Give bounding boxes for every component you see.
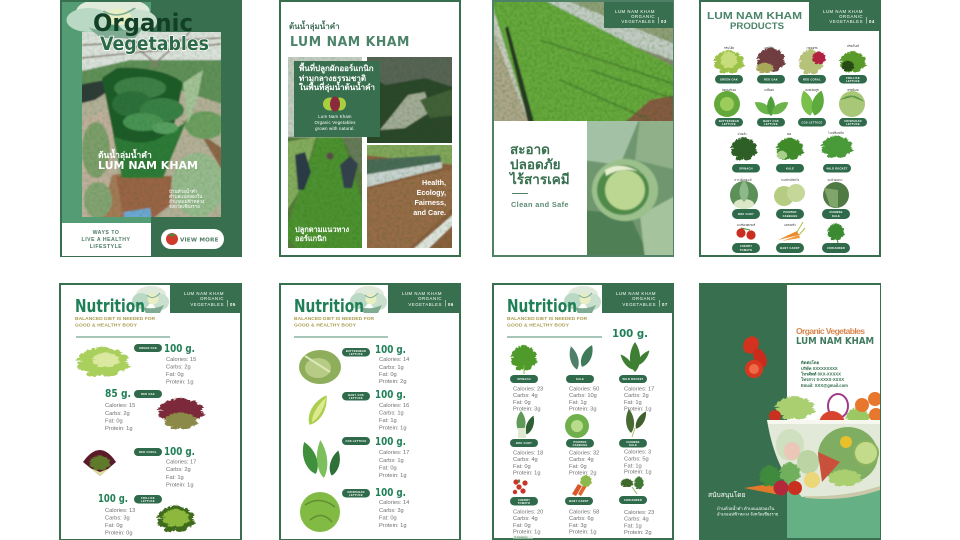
item: pointed cabbage: CABBAGE — [573, 443, 587, 447]
panel: nutrition page 07 — [493, 284, 673, 539]
cover small text: อำเภอแม่ฟ้าหลวง — [169, 199, 204, 204]
item: baby carot: Calories: 58 — [569, 510, 599, 516]
decorative cabbage — [350, 286, 387, 313]
cover small text — [169, 188, 204, 209]
item: frillice lettuce — [98, 492, 195, 536]
item: red coral: Fat: 1g — [166, 475, 184, 481]
product: pointed cabbage: POINTED — [783, 210, 797, 214]
item: wild rocket: Calories: 17 — [624, 386, 654, 392]
item: frillice lettuce: FRILLICE — [141, 496, 155, 500]
contact details: โทรศัพท์ 0XX-XXXXX — [800, 370, 841, 376]
photo: planting trays — [367, 145, 452, 248]
illustration: vegetables beside bowl — [744, 462, 802, 496]
item: cos lettuce: Protein: 1g — [379, 473, 407, 479]
product: baby cos lettuce: เบบี้คอส — [764, 88, 774, 92]
item: butterhead lettuce: Calories: 14 — [379, 357, 409, 363]
white caption box: LIVE A HEALTHY — [82, 237, 130, 243]
item: baby carot: BABY CAROT — [569, 499, 589, 503]
item: green oak: Carbs: 2g — [166, 364, 191, 370]
item: bok choy: Calories: 18 — [513, 450, 543, 456]
contact details — [800, 359, 848, 388]
product: red oak — [756, 46, 785, 84]
item: bok choy: Carbs: 4g — [513, 457, 538, 463]
product: red coral: เรดคอรัล — [806, 46, 818, 50]
item: red coral: Calories: 17 — [166, 460, 196, 466]
item: cos lettuce — [298, 435, 409, 479]
photo caption: principles: and Care. — [413, 208, 446, 217]
decorative cabbage — [564, 286, 601, 313]
heading: Nutrition — [75, 296, 145, 317]
green info box: grown with natural. — [315, 126, 355, 131]
item: cos lettuce: 100 g. — [375, 435, 406, 448]
subheading — [507, 316, 587, 328]
item: butterhead lettuce: BUTTERHEAD — [346, 349, 366, 353]
panel: back cover — [699, 283, 883, 540]
item: spinach: SPINACH — [517, 377, 531, 381]
section tag — [604, 2, 673, 28]
item: coriander — [619, 476, 654, 536]
item: crisphead lettuce: Protein: 1g — [379, 523, 407, 529]
panel: nutrition page 05 — [60, 284, 241, 540]
product: coriander: ผักชี — [834, 223, 840, 227]
heading: Nutrition — [507, 296, 577, 317]
green info box: ในพื้นที่ลุ่มน้ำต้นน้ำคำ — [299, 81, 375, 93]
item: kale: Carbs: 10g — [569, 393, 597, 399]
item: coriander: Calories: 23 — [624, 510, 654, 516]
product: frillice lettuce — [839, 44, 867, 84]
product: baby carot: BABY CAROT — [780, 246, 800, 250]
item: bok choy: Fat: 0g — [513, 464, 531, 470]
item: butterhead lettuce: 100 g. — [375, 343, 406, 356]
item: cherry tomato: TOMATO — [518, 501, 530, 505]
illustration: salad bowl — [767, 392, 883, 499]
section tag: 06 — [448, 302, 454, 307]
item: spinach: Fat: 0g — [513, 400, 531, 406]
subheading — [75, 316, 155, 328]
product: spinach: ปวยเล้ง — [737, 132, 747, 136]
icon: sliced tomatoes — [740, 333, 770, 378]
product: frillice lettuce: ฟริลล์ไอซ์ — [847, 44, 859, 48]
section tag: VEGETABLES — [190, 302, 224, 307]
product: butterhead lettuce: บัตเตอร์เฮด — [722, 88, 736, 92]
item: pointed cabbage: Fat: 0g — [569, 464, 587, 470]
contact details: ติดต่อโดย — [801, 359, 820, 365]
item: crisphead lettuce: CRISPHEAD — [347, 490, 365, 494]
product: red oak: เรดโอ๊ค — [764, 46, 774, 50]
item: crisphead lettuce: Carbs: 3g — [379, 508, 404, 514]
product: pointed cabbage: กะหล่ำปลีหัวใจ — [781, 178, 799, 182]
brand heading: LUM NAM KHAM — [290, 35, 410, 50]
item: frillice lettuce: LETTUCE — [141, 499, 155, 503]
item: red coral: Protein: 1g — [166, 482, 194, 488]
item: chinese kale: KALE — [629, 443, 637, 447]
product: kale: KALE — [786, 166, 794, 170]
heading — [707, 10, 802, 32]
section tag: 05 — [230, 302, 236, 307]
green info box: พื้นที่ปลูกผักออร์แกนิก — [299, 62, 374, 74]
item: baby carot: Fat: 3g — [569, 523, 587, 529]
product: kale: เคล — [787, 132, 792, 136]
serving size: 100 g. — [612, 327, 648, 340]
title: Organic: Organic — [93, 9, 193, 37]
item: crisphead lettuce: Fat: 0g — [379, 516, 397, 522]
subtitle: Clean and Safe — [511, 200, 569, 209]
product: spinach — [731, 132, 760, 172]
item: cherry tomato: Carbs: 4g — [513, 516, 538, 522]
product: crisphead lettuce: คริสป์เฮด — [847, 88, 859, 92]
item: green oak: Protein: 1g — [166, 380, 194, 386]
item: frillice lettuce: Fat: 0g — [105, 523, 123, 529]
item: spinach — [510, 345, 543, 412]
item: frillice lettuce: Carbs: 3g — [105, 516, 130, 522]
item: spinach: Carbs: 4g — [513, 393, 538, 399]
subheading: GOOD & HEALTHY BODY — [75, 322, 138, 328]
product: baby cos lettuce: BABY COS — [763, 119, 779, 123]
product: baby carot — [776, 222, 805, 253]
Thai slogan: ไร้สารเคมี — [508, 171, 570, 187]
green info box: Lum Nam Kham — [318, 114, 352, 119]
green info box: ท่ามกลางธรรมชาติ — [299, 74, 366, 83]
panel: page 2 about the farm — [280, 1, 460, 256]
item: cos lettuce: Carbs: 1g — [379, 458, 404, 464]
heading: organic vegetables: Organic Vegetables — [796, 326, 865, 336]
photo caption: principles: Fairness, — [414, 198, 446, 207]
contact details: โทรสาร 0-XXXX-XXXX — [800, 376, 844, 382]
section tag: ORGANIC — [418, 296, 442, 301]
item: baby cos lettuce: 100 g. — [375, 388, 406, 401]
item: pointed cabbage — [565, 414, 599, 476]
heading: LUM NAM KHAM — [707, 10, 802, 22]
product: pointed cabbage — [774, 178, 805, 219]
product: kale — [776, 132, 804, 172]
decorative cabbage — [132, 286, 169, 313]
panel: page 3 clean and safe — [490, 0, 677, 259]
product: baby cos lettuce: LETTUCE — [764, 122, 778, 126]
product: butterhead lettuce: LETTUCE — [722, 122, 736, 126]
product: wild rocket: WILD ROCKET — [826, 166, 848, 170]
section tag: VEGETABLES — [622, 302, 656, 307]
item: green oak: Fat: 0g — [166, 372, 184, 378]
item: red coral: Carbs: 2g — [166, 467, 191, 473]
item: pointed cabbage: POINTED — [573, 440, 587, 444]
cover small text: บ้านห้วยน้ำคำ — [169, 188, 198, 194]
green info box — [294, 61, 380, 137]
green info box: Organic Vegetables — [314, 120, 356, 125]
section tag: LUM NAM KHAM — [616, 291, 656, 296]
heading: brand: LUM NAM KHAM — [796, 336, 874, 347]
item: baby carot — [565, 475, 599, 536]
item: pointed cabbage: Calories: 32 — [569, 450, 599, 456]
item: wild rocket: Protein: 1g — [624, 406, 652, 412]
icon: lettuce logo — [323, 96, 346, 112]
item: baby cos lettuce: LETTUCE — [349, 396, 363, 400]
contact details: Email: XXX@gmail.com — [801, 383, 848, 388]
item: red oak: Protein: 1g — [105, 426, 133, 432]
subheading: BALANCED DIET IS NEEDED FOR — [75, 316, 155, 322]
section tag: VEGETABLES — [829, 19, 863, 24]
item: cherry tomato: CHERRY — [518, 498, 530, 502]
item: red coral — [83, 445, 196, 488]
cover small text: จังหวัดเชียงราย — [169, 203, 200, 209]
item: butterhead lettuce: Protein: 2g — [379, 379, 407, 385]
item: green oak: 100 g. — [164, 342, 195, 355]
photo caption: organic farming: ปลูกตามแนวทาง — [295, 225, 350, 235]
item: cherry tomato — [510, 479, 543, 539]
product: coriander: CORIANDER — [827, 246, 845, 250]
white caption box: LIFESTYLE — [90, 244, 122, 250]
item: kale: KALE — [576, 377, 584, 381]
item: green oak: GREEN OAK — [139, 346, 157, 350]
section tag: 07 — [662, 302, 668, 307]
sponsor heading: สนับสนุนโดย — [708, 491, 746, 499]
item: chinese kale: Protein: 1g — [624, 470, 652, 476]
item: chinese kale: Calories: 3 — [624, 450, 651, 456]
section tag: 04 — [869, 19, 875, 24]
section tag: 03 — [661, 19, 667, 24]
product: butterhead lettuce — [714, 88, 743, 126]
heading: Nutrition — [294, 296, 364, 317]
subheading — [294, 316, 374, 328]
item: wild rocket: Fat: 1g — [624, 400, 642, 406]
product: frillice lettuce: FRILLICE — [846, 76, 860, 80]
product: frillice lettuce: LETTUCE — [846, 79, 860, 83]
item: coriander: Fat: 1g — [624, 524, 642, 530]
sponsor address: บ้านห้วยน้ำคำ ตำบลแม่สลองใน — [717, 505, 774, 511]
section tag: LUM NAM KHAM — [402, 291, 442, 296]
item: crisphead lettuce: LETTUCE — [349, 493, 363, 497]
section tag — [388, 284, 460, 313]
item: bok choy: Protein: 1g — [513, 470, 541, 476]
item: baby cos lettuce: BABY COS — [348, 393, 364, 397]
item: butterhead lettuce: Carbs: 1g — [379, 365, 404, 371]
item: wild rocket — [618, 342, 654, 412]
view more button: VIEW MORE — [180, 238, 219, 244]
product: baby carot: แครอทจิ๋ว — [784, 222, 796, 227]
white caption box — [62, 223, 151, 256]
section tag: VEGETABLES — [408, 302, 442, 307]
panel: page 4 products — [700, 1, 880, 256]
cover brand name: LUM NAM KHAM — [98, 160, 198, 172]
photo: aerial view — [367, 57, 452, 143]
item: chinese kale: CHINESE — [626, 440, 640, 444]
item: cos lettuce: Calories: 17 — [379, 450, 409, 456]
product: cherry tomato: CHERRY — [740, 244, 752, 248]
item: baby cos lettuce: Fat: 1g — [379, 418, 397, 424]
product: spinach: SPINACH — [739, 166, 753, 170]
item: chinese kale: Carbs: 5g — [624, 456, 649, 462]
cover small text: ตำบลแม่สลองใน — [169, 194, 203, 199]
product: chinese kale: คะน้าฮ่องกง — [828, 178, 843, 182]
item: frillice lettuce: Calories: 13 — [105, 508, 135, 514]
photo caption: principles: Health, — [422, 178, 446, 187]
item: crisphead lettuce: Calories: 14 — [379, 500, 409, 506]
product: coriander — [822, 223, 850, 253]
item: bok choy — [510, 411, 543, 476]
item: bok choy: BOK CHOY — [516, 441, 532, 445]
item: pointed cabbage: Carbs: 4g — [569, 457, 594, 463]
photo: cabbage — [587, 121, 673, 255]
section tag: LUM NAM KHAM — [615, 9, 655, 14]
serving note: (1 tomatoes) — [514, 536, 528, 539]
section tag — [170, 284, 241, 313]
white caption box: WAYS TO — [93, 230, 119, 236]
item: frillice lettuce: 100 g. — [98, 492, 128, 505]
item: crisphead lettuce — [300, 486, 409, 532]
section tag: LUM NAM KHAM — [823, 9, 863, 14]
item: red oak: Fat: 0g — [105, 418, 123, 424]
subheading: BALANCED DIET IS NEEDED FOR — [507, 316, 587, 322]
product: cherry tomato: TOMATO — [740, 248, 752, 252]
product: cos lettuce: คอสเลตทูซ — [805, 88, 819, 92]
product: green oak — [714, 46, 744, 84]
product: bok choy: BOK CHOY — [738, 212, 754, 216]
product: chinese kale: KALE — [832, 214, 840, 218]
product: wild rocket: ไวลด์ร็อกเก็ต — [827, 130, 844, 135]
section tag — [602, 284, 673, 313]
item: coriander: Protein: 2g — [624, 530, 652, 536]
product: chinese kale — [822, 178, 850, 219]
item: kale: Calories: 50 — [569, 386, 599, 392]
product: bok choy: กวางตุ้งฮ่องเต้ — [735, 178, 752, 183]
item: spinach: Protein: 3g — [513, 406, 541, 412]
item: wild rocket: Carbs: 2g — [624, 393, 649, 399]
item: baby carot: Carbs: 6g — [569, 516, 594, 522]
item: cherry tomato: Protein: 1g — [513, 530, 541, 536]
product: pointed cabbage: CABBAGE — [783, 214, 797, 218]
sponsor address: อำเภอแม่ฟ้าหลวง จังหวัดเชียงราย — [717, 512, 779, 516]
panel: nutrition page 06 — [280, 284, 460, 540]
subheading: GOOD & HEALTHY BODY — [507, 322, 570, 328]
item: green oak: Calories: 15 — [166, 357, 196, 363]
item: butterhead lettuce: Fat: 0g — [379, 372, 397, 378]
contact details: บริษัท XXXXXXXXX — [801, 366, 838, 371]
item: kale: Fat: 1g — [569, 400, 587, 406]
item: frillice lettuce: Protein: 0g — [105, 530, 133, 536]
product: baby cos lettuce — [752, 88, 791, 126]
item: spinach: Calories: 23 — [513, 386, 543, 392]
section tag: LUM NAM KHAM — [184, 291, 224, 296]
item: crisphead lettuce: 100 g. — [375, 486, 406, 499]
item: cos lettuce: COS LETTUCE — [345, 439, 367, 443]
product: red oak: RED OAK — [764, 77, 778, 81]
item: cherry tomato: Calories: 20 — [513, 510, 543, 516]
photo caption: organic farming — [295, 225, 350, 243]
product: red coral — [798, 46, 826, 84]
item: cherry tomato: Fat: 0g — [513, 523, 531, 529]
Thai slogan: สะอาด — [510, 142, 550, 157]
item: red coral: 100 g. — [164, 445, 195, 458]
product: bok choy — [730, 178, 760, 219]
item: baby cos lettuce — [304, 388, 409, 432]
product: cherry tomato: มะเขือเทศเชอรี่ — [737, 223, 756, 227]
item: butterhead lettuce — [299, 343, 409, 385]
item: chinese kale — [619, 409, 652, 476]
cover photo: vegetables in banana leaf — [78, 28, 225, 221]
section tag: VEGETABLES — [621, 19, 655, 24]
product: crisphead lettuce: LETTUCE — [846, 122, 860, 126]
item: coriander: Carbs: 4g — [624, 516, 649, 522]
photo: seedling beds — [490, 0, 677, 125]
item: baby carot: Protein: 1g — [569, 530, 597, 536]
cover Thai heading: ต้นน้ำลุ่มน้ำคำ — [98, 148, 152, 161]
product: cos lettuce — [798, 88, 827, 126]
Thai heading: ต้นน้ำลุ่มน้ำคำ — [289, 20, 340, 32]
item: red oak: 85 g. — [105, 387, 131, 400]
section tag: ORGANIC — [839, 14, 863, 19]
product: wild rocket — [821, 130, 853, 172]
product: red coral: RED CORAL — [803, 77, 821, 81]
item: baby cos lettuce: Calories: 16 — [379, 403, 409, 409]
section tag — [809, 2, 880, 31]
photo caption: organic farming: ออร์แกนิก — [295, 234, 327, 243]
item: red oak: Calories: 15 — [105, 403, 135, 409]
item: butterhead lettuce: LETTUCE — [349, 352, 363, 356]
item: green oak — [77, 342, 196, 386]
item: kale: Protein: 3g — [569, 406, 597, 412]
sponsor address — [717, 505, 779, 516]
panel: cover page — [60, 0, 242, 257]
product: cos lettuce: COS LETTUCE — [801, 120, 823, 124]
section tag: ORGANIC — [631, 14, 655, 19]
product: green oak: กรีนโอ๊ค — [724, 46, 734, 50]
section tag: ORGANIC — [632, 296, 656, 301]
section tag: ORGANIC — [200, 296, 224, 301]
item: cos lettuce: Fat: 0g — [379, 466, 397, 472]
item: coriander: CORIANDER — [624, 498, 642, 502]
product: butterhead lettuce: BUTTERHEAD — [719, 119, 739, 123]
decorative cabbage — [66, 0, 157, 38]
product: cherry tomato — [732, 223, 760, 253]
item: baby cos lettuce: Protein: 1g — [379, 426, 407, 432]
item: kale — [566, 343, 599, 412]
product: chinese kale: CHINESE — [829, 210, 843, 214]
photo caption: principles: Ecology, — [417, 188, 446, 197]
item: chinese kale: Fat: 1g — [624, 464, 642, 470]
product: crisphead lettuce — [839, 88, 867, 126]
Thai slogan — [508, 142, 570, 187]
item: red oak: Carbs: 2g — [105, 411, 130, 417]
product: crisphead lettuce: CRISPHEAD — [844, 119, 862, 123]
heading: PRODUCTS — [730, 21, 784, 32]
product: green oak: GREEN OAK — [720, 77, 738, 81]
item: red oak: RED OAK — [141, 392, 155, 396]
item: pointed cabbage: Protein: 2g — [569, 470, 597, 476]
view more button — [161, 229, 224, 249]
photo caption: principles — [413, 178, 446, 217]
photo: farmers in field — [288, 57, 362, 248]
Thai slogan: ปลอดภัย — [510, 157, 561, 172]
subheading: BALANCED DIET IS NEEDED FOR — [294, 316, 374, 322]
item: red coral: RED CORAL — [139, 450, 157, 454]
item: baby cos lettuce: Carbs: 1g — [379, 410, 404, 416]
subheading: GOOD & HEALTHY BODY — [294, 322, 357, 328]
item: red oak — [105, 387, 204, 432]
title: Vegetables: Vegetables — [100, 33, 209, 55]
item: wild rocket: WILD ROCKET — [622, 377, 644, 381]
